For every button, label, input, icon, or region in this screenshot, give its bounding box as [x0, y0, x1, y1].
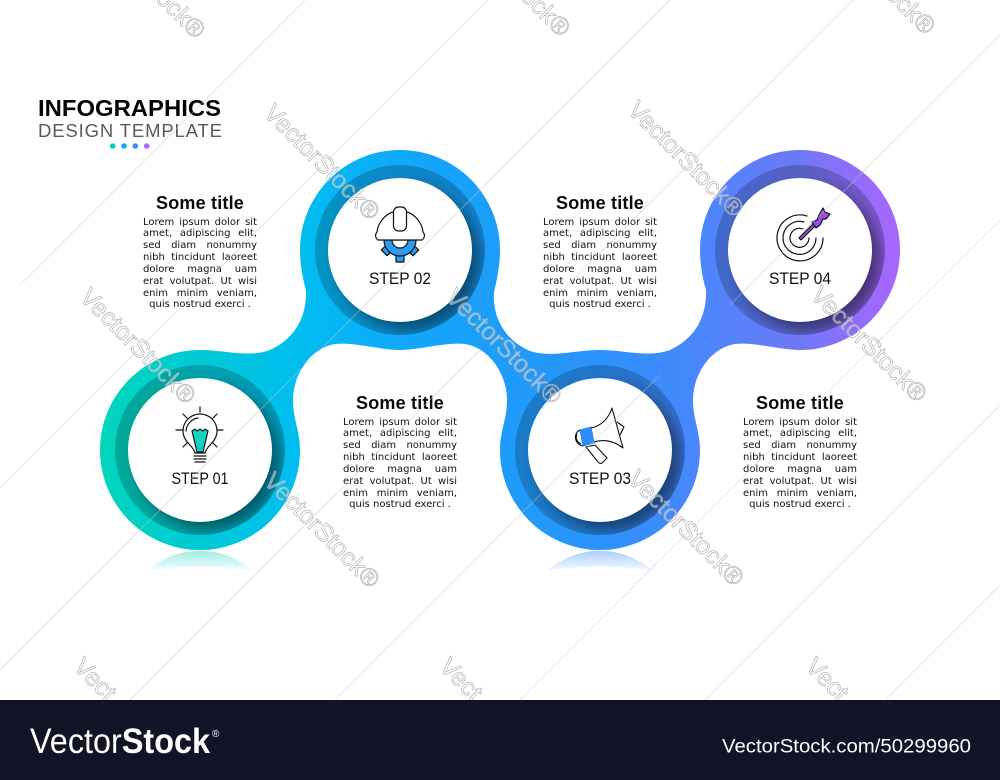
icon: helmet and gear [376, 207, 424, 262]
text block: lower right: erat volutpat. Ut wisi [743, 476, 857, 487]
text block: top middle-right: Lorem ipsum dolor sit [543, 216, 657, 228]
reflection under step 03 [545, 551, 655, 572]
footer logo: VectorStock [30, 722, 210, 761]
text: Some title [156, 192, 244, 212]
text block: lower right: Lorem ipsum dolor sit [743, 416, 857, 428]
step 01 label: STEP 01 [172, 470, 228, 488]
step 02 node [315, 165, 485, 335]
heading: INFOGRAPHICS [38, 95, 221, 121]
text block: top middle-right [543, 192, 657, 310]
text block: top left: nibh tincidunt laoreet [143, 252, 257, 263]
reflection under step 01 [145, 551, 255, 572]
step 03 label: STEP 03 [569, 470, 631, 488]
text block: top middle-right: amet, adipiscing elit, [543, 228, 657, 239]
text block: lower middle-left: enim minim veniam, [343, 488, 457, 499]
text block: lower middle-left: nibh tincidunt laoreet [343, 452, 457, 463]
text block: lower right: nibh tincidunt laoreet [743, 452, 857, 463]
text block: lower middle-left: quis nostrud exerci . [349, 499, 451, 510]
text block: lower right: quis nostrud exerci . [749, 499, 851, 510]
icon: target with arrow [777, 208, 830, 261]
text: Some title [556, 192, 644, 212]
watermark overlay: VectorStock® [258, 467, 386, 594]
step 04 label: STEP 04 [769, 270, 831, 288]
heading dots [110, 143, 150, 149]
heading: DESIGN TEMPLATE [38, 120, 222, 141]
footer url: VectorStock.com/50299960 [722, 736, 971, 758]
text block: lower right [743, 392, 857, 510]
watermark overlay: Vect [800, 652, 854, 707]
text block: top left: amet, adipiscing elit, [143, 228, 257, 239]
watermark overlay: VectorStock® [440, 283, 568, 410]
text block: lower right: enim minim veniam, [743, 488, 857, 499]
text: Some title [756, 392, 844, 412]
text block: lower right: dolore magna uam [743, 464, 857, 475]
text block: lower middle-left: sed diam nonummy [343, 440, 457, 451]
footer bar [0, 700, 1000, 780]
text block: top left: dolore magna uam [143, 264, 257, 275]
text block: lower middle-left: erat volutpat. Ut wisi [343, 476, 457, 487]
text block: top middle-right: sed diam nonummy [543, 240, 657, 251]
text block: lower middle-left: Lorem ipsum dolor sit [343, 416, 457, 428]
text block: top middle-right: erat volutpat. Ut wisi [543, 276, 657, 287]
step 03 node [515, 365, 685, 535]
icon: light bulb [176, 407, 223, 462]
text block: top middle-right: dolore magna uam [543, 264, 657, 275]
watermark overlay: VectorStock® [805, 281, 933, 408]
text block: lower middle-left: amet, adipiscing elit, [343, 428, 457, 439]
text block: lower right: sed diam nonummy [743, 440, 857, 451]
watermark overlay: VectorStock® [74, 283, 202, 410]
watermark overlay: Vect [68, 652, 122, 707]
text block: top middle-right: quis nostrud exerci . [549, 299, 651, 310]
heading [38, 95, 222, 141]
watermark overlay: VectorStock® [622, 96, 750, 223]
step 01 node [115, 365, 285, 535]
step 04 node [715, 165, 885, 335]
text block: top left: quis nostrud exerci . [149, 299, 251, 310]
watermark overlay: VectorStock® [622, 465, 750, 592]
text block: top left: Lorem ipsum dolor sit [143, 216, 257, 228]
text block: lower right: amet, adipiscing elit, [743, 428, 857, 439]
text block: top left: erat volutpat. Ut wisi [143, 276, 257, 287]
connected circles ribbon [100, 150, 900, 550]
text block: top middle-right: enim minim veniam, [543, 288, 657, 299]
text block: top left: enim minim veniam, [143, 288, 257, 299]
text block: lower middle-left [343, 392, 457, 510]
text block: top left [143, 192, 257, 310]
watermark overlay: Vect [434, 652, 488, 707]
step 02 label: STEP 02 [369, 270, 431, 288]
watermark overlay: VectorStock® [258, 99, 386, 226]
icon: megaphone [575, 408, 624, 463]
text block: top left: sed diam nonummy [143, 240, 257, 251]
text block: lower middle-left: dolore magna uam [343, 464, 457, 475]
text block: top middle-right: nibh tincidunt laoreet [543, 252, 657, 263]
footer logo registered mark: ® [212, 729, 220, 740]
text: Some title [356, 392, 444, 412]
